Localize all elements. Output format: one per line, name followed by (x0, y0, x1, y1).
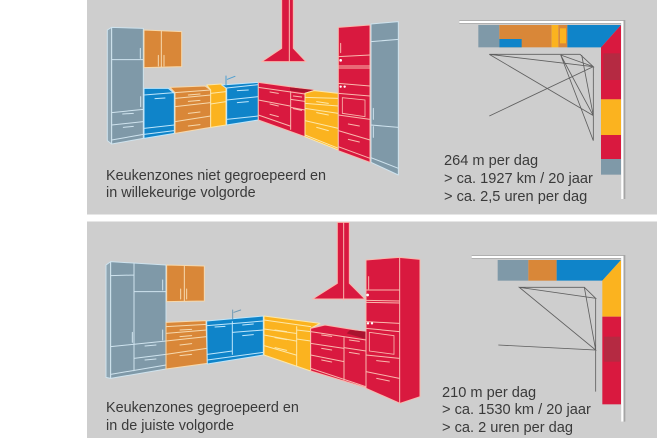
stats: bottom right: > ca. 1530 km / 20 jaar (442, 402, 591, 418)
blue sink cabinets (207, 310, 263, 364)
kitchen: grouped (106, 222, 420, 403)
wall outline (472, 257, 623, 422)
caption: bottom left: in de juiste volgorde (106, 418, 234, 434)
kitchen: not grouped (107, 0, 398, 175)
red base cabinets (258, 82, 314, 137)
yellow cabinet (207, 84, 226, 127)
yellow base cabinets (305, 91, 338, 150)
wall outline (459, 22, 623, 199)
caption: bottom left: Keukenzones gegroepeerd en (106, 400, 299, 416)
stats: bottom right: > ca. 2 uren per dag (442, 420, 573, 436)
red tall cabinet (366, 257, 420, 403)
stats: bottom right: 210 m per dag (442, 385, 536, 401)
zone bar: bottom (498, 260, 621, 404)
red tall cabinet (338, 25, 370, 162)
grey tall cabinets (106, 262, 166, 378)
orange wall cabinet (167, 265, 204, 302)
panel: bottom background (87, 222, 657, 438)
stats: top right: > ca. 2,5 uren per dag (444, 189, 587, 205)
blue sink cabinet (222, 76, 258, 125)
floor plan: grouped (472, 257, 623, 422)
stats: top right: > ca. 1927 km / 20 jaar (444, 171, 593, 187)
tall grey cabinet (107, 27, 143, 144)
orange wall cabinet (144, 30, 182, 68)
panel: top background (87, 0, 657, 214)
yellow cabinets (264, 316, 320, 371)
grey fridge (371, 22, 398, 175)
red base cabinets (311, 325, 366, 388)
caption: top left: in willekeurige volgorde (106, 185, 256, 201)
orange drawers (166, 321, 207, 369)
range hood top (262, 0, 306, 62)
zone bar: top (478, 25, 621, 175)
floor plan: not grouped (459, 22, 623, 199)
range hood bottom (313, 222, 365, 300)
orange drawers (170, 86, 211, 133)
walking routes (498, 287, 596, 392)
walking routes (489, 54, 593, 141)
blue dishwasher (144, 88, 174, 138)
caption: top left: Keukenzones niet gegroepeerd en (106, 168, 326, 184)
stats: top right: 264 m per dag (444, 153, 538, 169)
